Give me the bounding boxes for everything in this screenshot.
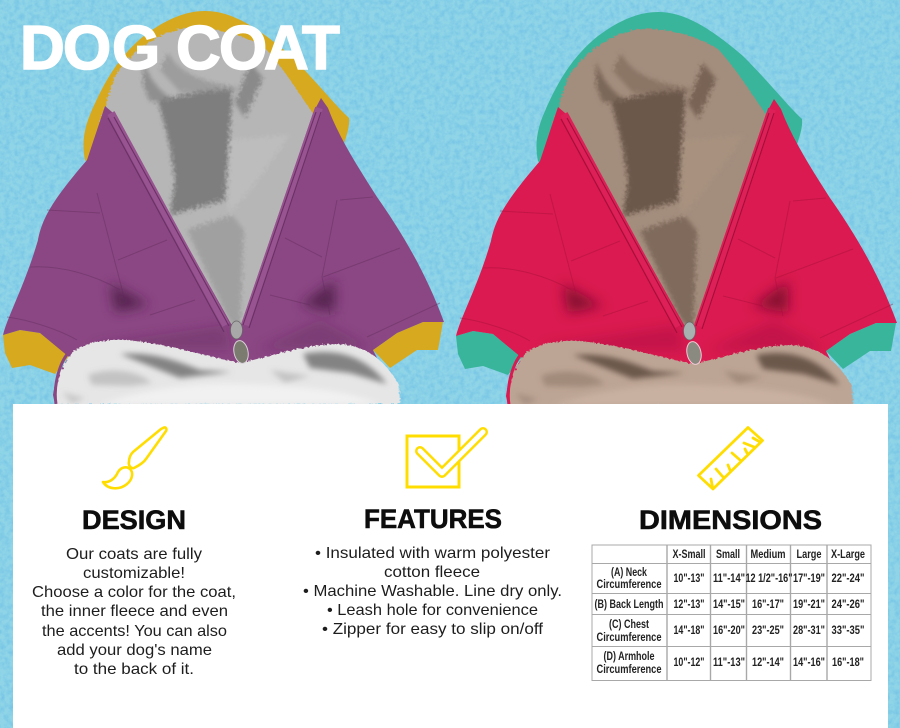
table row: armhole: (D) Armhole xyxy=(604,651,654,663)
icon: paintbrush xyxy=(103,427,166,488)
table row: neck: (A) Neck xyxy=(611,567,647,579)
zipper pull xyxy=(230,321,250,365)
table header row xyxy=(672,549,865,561)
table header row: X-Large xyxy=(831,549,865,561)
table row: back length xyxy=(594,599,864,611)
bottom fleece: tan xyxy=(508,341,853,405)
quilting seams xyxy=(7,193,440,340)
table header row: Medium xyxy=(750,549,786,561)
zipper strips xyxy=(108,108,321,332)
bottom fleece: white xyxy=(55,340,400,404)
table row: neck: 22"-24" xyxy=(832,573,864,585)
text: design description: Choose a color for the coat, xyxy=(32,584,236,601)
text: features list: • Machine Washable. Line dry only. xyxy=(303,583,562,600)
icon: ruler xyxy=(698,428,762,489)
table row: back length: 16"-17" xyxy=(752,599,784,611)
table row: back length: 19"-21" xyxy=(793,599,825,611)
panel: design xyxy=(32,427,236,678)
panel: dimensions xyxy=(592,428,871,680)
text: features list: cotton fleece xyxy=(384,564,480,581)
text: features list xyxy=(303,545,562,638)
hood rib: yellow xyxy=(83,11,349,200)
hood fleece: tan xyxy=(550,29,773,346)
table row: chest: Circumference xyxy=(596,632,662,644)
coat body: red xyxy=(456,99,897,405)
table row: chest xyxy=(596,619,864,644)
fleece highlight xyxy=(100,384,380,404)
table row: armhole: 12"-14" xyxy=(752,657,784,669)
table row: neck: 12 1/2"-16" xyxy=(746,573,792,585)
heading: design: DESIGN xyxy=(82,505,186,535)
cuffs: yellow xyxy=(3,330,69,374)
table row: neck: Circumference xyxy=(596,579,662,591)
text: features list: • Leash hole for convenience xyxy=(327,602,538,619)
coat: red with teal accents xyxy=(456,12,897,405)
bottom fleece rim: red xyxy=(508,351,524,405)
table row: back length: (B) Back Length xyxy=(594,599,664,611)
quilting seams xyxy=(460,194,893,341)
coat: purple with yellow accents xyxy=(3,11,444,404)
bottom fleece rim: purple xyxy=(55,350,71,404)
table row: armhole xyxy=(596,651,864,676)
fleece highlight xyxy=(553,385,833,405)
hood fleece shadows xyxy=(596,53,743,331)
fleece inner shadows xyxy=(62,352,387,404)
table row: back length: 24"-26" xyxy=(832,599,864,611)
zipper pull xyxy=(684,322,703,366)
hood fleece shadows xyxy=(143,52,290,330)
coat body: purple xyxy=(3,98,444,404)
text: design description: customizable! xyxy=(83,565,185,582)
table row: neck: 17"-19" xyxy=(793,573,825,585)
cuffs: teal xyxy=(456,331,522,375)
table: size chart xyxy=(592,545,871,680)
table row: neck xyxy=(596,567,864,591)
table row: chest: 28"-31" xyxy=(793,625,825,637)
table row: chest: (C) Chest xyxy=(609,619,649,631)
icon: checkbox xyxy=(407,432,483,487)
table row: back length: 14"-15" xyxy=(713,599,745,611)
text: design description: to the back of it. xyxy=(74,661,194,678)
hood rib: teal xyxy=(536,12,802,201)
text: features list: • Zipper for easy to slip on/off xyxy=(322,621,544,638)
table row: armhole: Circumference xyxy=(596,664,662,676)
shading: under-arm folds xyxy=(543,281,825,351)
title: DOG COAT xyxy=(20,14,340,83)
fleece inner shadows xyxy=(515,353,840,405)
table row: neck: 10"-13" xyxy=(674,573,704,585)
zipper strips xyxy=(561,109,774,333)
table header row: X-Small xyxy=(672,549,706,561)
panel: features xyxy=(303,432,562,638)
text: design description xyxy=(32,546,236,678)
table row: armhole: 14"-16" xyxy=(793,657,825,669)
text: design description: the inner fleece and even xyxy=(41,603,228,620)
table row: armhole: 10"-12" xyxy=(674,657,704,669)
heading: features: FEATURES xyxy=(364,504,502,534)
table row: armhole: 11"-13" xyxy=(713,657,745,669)
text: design description: add your dog's name xyxy=(57,642,212,659)
heading: dimensions: DIMENSIONS xyxy=(639,505,822,535)
table row: chest: 33"-35" xyxy=(832,625,864,637)
text: design description: Our coats are fully xyxy=(66,546,202,563)
table header row: Small xyxy=(716,549,740,561)
table row: chest: 14"-18" xyxy=(674,625,704,637)
table header row: Large xyxy=(796,549,822,561)
text: design description: the accents! You can also xyxy=(42,623,227,640)
table row: chest: 23"-25" xyxy=(752,625,784,637)
table row: neck: 11"-14" xyxy=(713,573,745,585)
table row: armhole: 16"-18" xyxy=(832,657,864,669)
shading: under-arm folds xyxy=(90,280,372,350)
text: features list: • Insulated with warm polyester xyxy=(315,545,551,562)
table row: back length: 12"-13" xyxy=(674,599,704,611)
table row: chest: 16"-20" xyxy=(713,625,745,637)
hood fleece: grey xyxy=(97,28,320,345)
white info panel xyxy=(13,404,888,728)
